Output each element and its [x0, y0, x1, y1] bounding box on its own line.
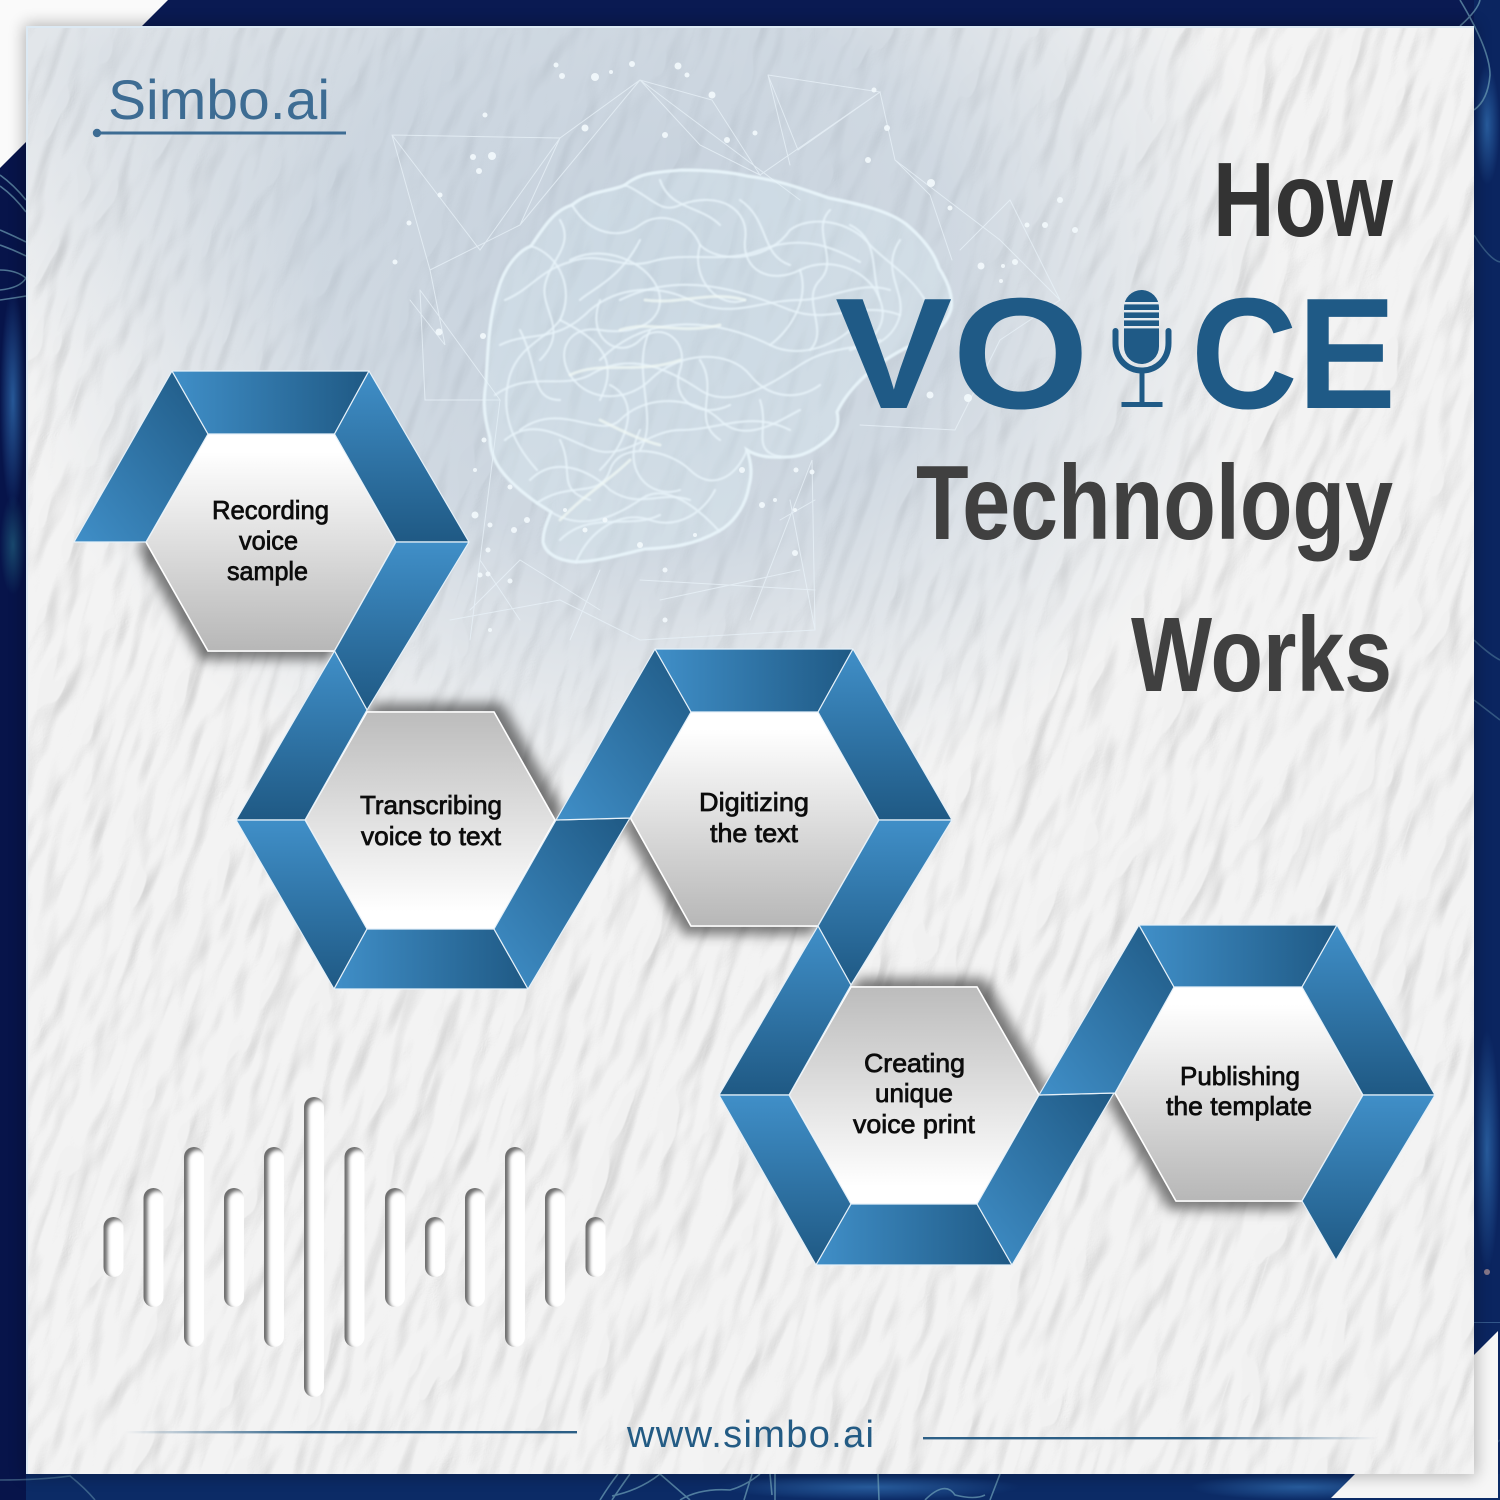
step 1 hexagon: Recording voice sample — [146, 434, 396, 651]
step 1 hexagon: Recording voice sample: sample — [227, 556, 308, 586]
step 4 hexagon: Creating unique voice print: voice print — [853, 1109, 976, 1139]
title word: VOICE with microphone — [835, 266, 1396, 442]
title word: VOICE with microphone: VO — [835, 266, 1089, 442]
footer website with rules: www.simbo.ai — [626, 1414, 874, 1456]
step 3 hexagon: Digitizing the text: Digitizing — [699, 787, 809, 817]
brain folds — [495, 180, 925, 562]
blue ribbon chain — [74, 371, 1435, 1265]
step 2 hexagon: Transcribing voice to text: Transcribing — [360, 790, 502, 820]
title word: How: How — [1213, 141, 1393, 259]
logo: Simbo.ai: Simbo.ai — [108, 68, 330, 131]
white corner fold: bottom right — [1331, 1331, 1498, 1498]
hexagon process flow — [74, 371, 1435, 1265]
title: How Voice Technology Works — [835, 141, 1396, 714]
step 2 hexagon: Transcribing voice to text: voice to text — [361, 821, 502, 851]
debossed sound waveform — [104, 1097, 606, 1397]
step 2 hexagon: Transcribing voice to text — [305, 712, 555, 929]
network mesh lines — [392, 75, 1060, 640]
icon: microphone replacing the letter I — [1116, 290, 1168, 407]
step 1 hexagon: Recording voice sample: Recording — [212, 495, 329, 525]
brain outline — [484, 170, 952, 562]
title word: Technology: Technology — [916, 444, 1393, 562]
brain body glow — [484, 170, 952, 562]
step 3 hexagon: Digitizing the text — [630, 712, 879, 926]
step 3 hexagon: Digitizing the text: the text — [710, 818, 799, 848]
brain network illustration — [392, 61, 1078, 640]
step 4 hexagon: Creating unique voice print: Creating — [864, 1048, 965, 1078]
network dots — [392, 61, 1078, 632]
step 5 hexagon: Publishing the template — [1115, 987, 1363, 1201]
step 4 hexagon: Creating unique voice print — [789, 987, 1039, 1204]
step 5 hexagon: Publishing the template: Publishing — [1180, 1061, 1300, 1091]
step 5 hexagon: Publishing the template: the template — [1166, 1091, 1312, 1121]
step 4 hexagon: Creating unique voice print: unique — [875, 1078, 953, 1108]
title word: Works: Works — [1131, 596, 1392, 714]
title word: VOICE with microphone: CE — [1191, 266, 1396, 442]
white corner fold: top left — [0, 0, 168, 168]
step 1 hexagon: Recording voice sample: voice — [239, 526, 298, 556]
